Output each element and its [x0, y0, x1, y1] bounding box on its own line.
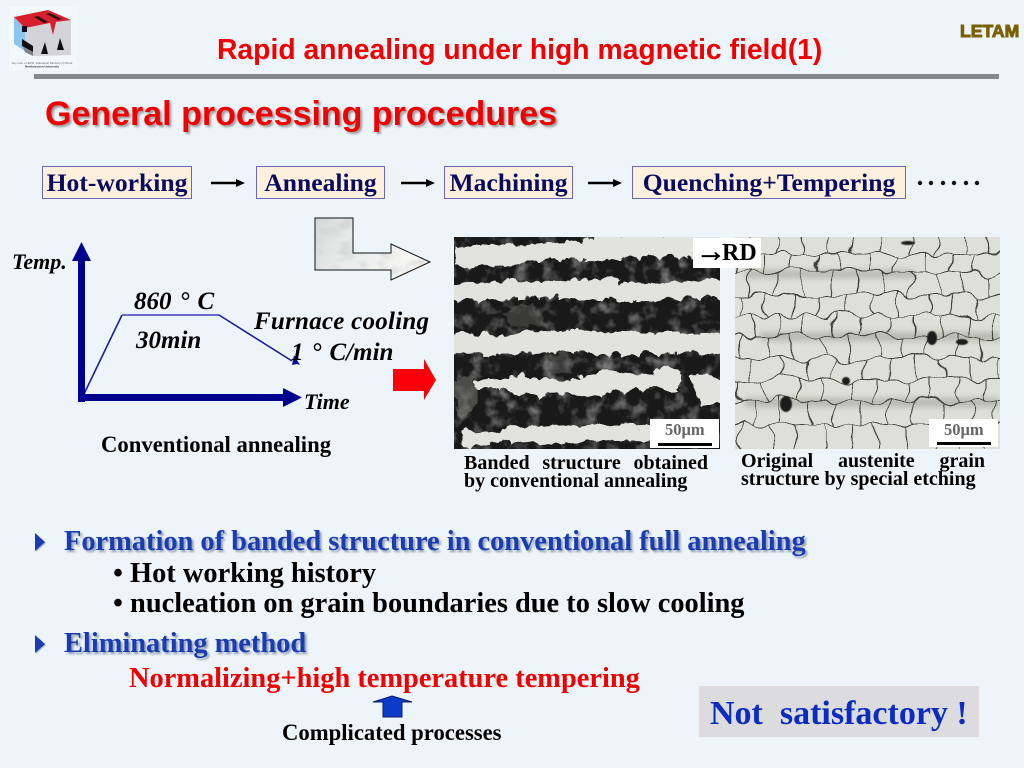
- scale line: [658, 443, 712, 446]
- heading: formation of banded structure: Formation of banded structure in conventional full annealing: [64, 526, 806, 557]
- RD direction label: →: [696, 235, 726, 268]
- callout: not satisfactory: [699, 686, 979, 737]
- logo: Key Lab. of EPM, Education Ministry of China: [12, 61, 73, 65]
- logo: [12, 10, 73, 68]
- caption: banded structure: [464, 452, 708, 492]
- step: annealing: Annealing: [264, 168, 377, 197]
- RD direction label: [693, 238, 761, 268]
- label: cooling rate: 1 ° C/min: [291, 339, 393, 366]
- scale label: 50μm: [665, 420, 705, 439]
- scale line: [937, 442, 991, 445]
- header rule: [34, 74, 999, 79]
- heating curve: [84, 315, 292, 394]
- caption: banded structure: Banded: [464, 452, 530, 474]
- heading: general processing procedures: General processing procedures: [45, 95, 557, 133]
- axis label: temp: Temp.: [12, 249, 67, 274]
- bullet icon: formation: [35, 533, 46, 552]
- list: causes: • nucleation on grain boundaries due to slow cooling: [113, 588, 744, 619]
- step: machining: Machining: [449, 168, 568, 197]
- scale bar: banded image: [650, 419, 719, 448]
- caption: banded structure: structure: [542, 452, 621, 474]
- label: 860 C: 860 ° C: [134, 288, 214, 315]
- caption: austenite grain: grain: [939, 450, 985, 472]
- step: hot-working: Hot-working: [47, 168, 187, 197]
- RD direction label: RD: [722, 240, 757, 266]
- red arrow: [393, 359, 436, 400]
- ellipsis dots: [918, 180, 980, 186]
- brand mark: LETAM: LETAM: [960, 21, 1019, 41]
- dark etch spots: [780, 241, 968, 412]
- callout: not satisfactory: Not satisfactory !: [710, 695, 968, 732]
- list: causes: [113, 558, 744, 619]
- scale label: 50μm: [944, 420, 984, 439]
- bent arrow to micrographs: [314, 218, 431, 281]
- title: Rapid annealing under high magnetic field(1): [217, 33, 822, 65]
- micrograph: banded structure: [454, 237, 720, 449]
- micrograph: austenite grains: [735, 237, 1000, 449]
- label: furnace cooling: Furnace cooling: [254, 308, 429, 335]
- heading: eliminating method: Eliminating method: [64, 628, 306, 659]
- axis label: time: Time: [304, 389, 350, 414]
- logo: Northeastern University: [25, 64, 59, 68]
- up arrow: [372, 696, 412, 718]
- bullet icon: eliminating: [35, 635, 46, 654]
- caption: banded structure: by conventional annealing: [464, 470, 687, 492]
- caption: banded structure: obtained: [634, 452, 708, 474]
- step: quenching+tempering: Quenching+Tempering: [643, 168, 895, 197]
- caption: austenite grain: [741, 450, 985, 490]
- caption: austenite grain: Original: [741, 450, 813, 472]
- caption: austenite grain: structure by special etching: [741, 468, 976, 490]
- process flow: [42, 166, 980, 199]
- chart caption: Conventional annealing: [101, 432, 331, 457]
- scale bar: grain image: [929, 419, 998, 447]
- label: 30min: 30min: [136, 327, 201, 354]
- list: causes: • Hot working history: [113, 558, 376, 589]
- soft dark bands: [745, 270, 1000, 407]
- grain boundary network: [725, 230, 1010, 455]
- caption: austenite grain: austenite: [838, 450, 915, 472]
- annealing chart: [72, 242, 302, 407]
- flow arrows: [211, 179, 622, 187]
- red method text: Normalizing+high temperature tempering: [129, 663, 640, 694]
- axes: [72, 242, 302, 407]
- note: complicated processes: Complicated processes: [282, 720, 502, 745]
